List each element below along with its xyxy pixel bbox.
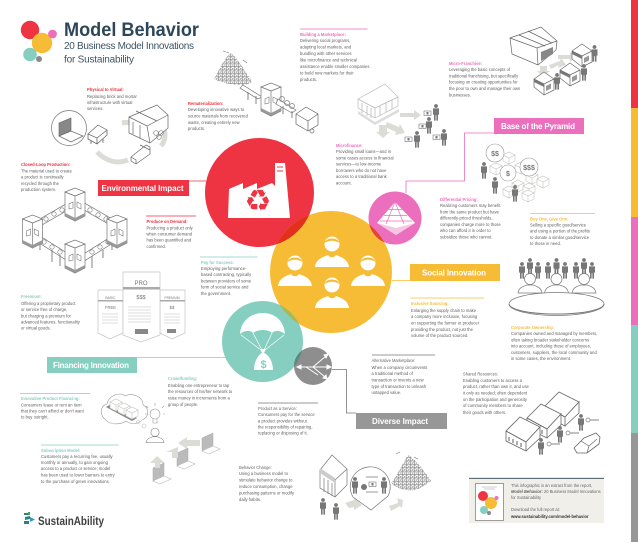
- report cover thumbnail: [476, 484, 504, 520]
- circle: environmental impact: [205, 138, 314, 247]
- illustration: pricing tables: $$: [170, 305, 175, 310]
- text: micro-franchise: traditional franchising, but specifically: [449, 74, 519, 78]
- text: corporate ownership: Corporate Ownership:: [511, 325, 554, 330]
- text: physical to virtual: Replacing brick and mortar: [87, 94, 138, 99]
- text: physical to virtual: [87, 87, 138, 111]
- text: freemium: Offering a proprietary product: [21, 301, 76, 306]
- illustration: shared houses and car: [506, 392, 600, 455]
- text: micro-franchise: the poor to own and manage their own: [449, 86, 521, 91]
- text: pay for success: [200, 257, 258, 296]
- text: inclusive sourcing: providing the product, not just the: [411, 327, 474, 332]
- text: alternative marketplace: Alternative Marketplace:: [372, 358, 415, 363]
- text: innovative product financing: that they can't afford or don't want: [21, 408, 85, 414]
- illustration: closed-loop production: [22, 188, 127, 273]
- illustration: behavior change: [320, 452, 431, 520]
- illustration: base of the pyramid: [481, 144, 549, 202]
- text: building a marketplace: like microfinance and technical: [300, 58, 357, 62]
- text: behavior change: Behavior Change:: [239, 465, 272, 470]
- text: shared resources: of community members to share: [463, 403, 523, 408]
- illustration: pricing tables: FREE: [105, 305, 116, 310]
- text: shared resources: their goods with others.: [463, 410, 506, 415]
- text: alternative marketplace: When a company circumvents: [372, 365, 427, 370]
- circle: social innovation: [270, 211, 392, 333]
- text: micro-franchise: Leveraging the basic concepts of: [449, 67, 511, 72]
- text: freemium: advanced features, functionality: [21, 320, 81, 324]
- callout text: Download the full report at:: [511, 507, 560, 512]
- text: innovative product financing: Innovative Product Financing:: [21, 396, 80, 401]
- colour stripe: [631, 0, 638, 542]
- text: shared resources: product, rather than own it, and use: [463, 384, 530, 389]
- label: environmental impact: Environmental Impact: [102, 184, 184, 193]
- label: diverse impact: [356, 413, 447, 429]
- text: buy one, give one: Selling a specific good/service: [530, 222, 587, 228]
- text: freemium: [21, 294, 81, 330]
- text: produce on demand: Produce on Demand:: [146, 219, 188, 224]
- text: micro-franchise: businesses.: [449, 92, 471, 98]
- text: differential pricing: differently-priced thresholds,: [440, 216, 493, 220]
- title: 20 Business Model Innovations: [64, 41, 194, 52]
- text: behavior change: [239, 465, 295, 502]
- text: freemium: Freemium:: [21, 294, 42, 299]
- text: microfinance: access to a traditional bank: [336, 174, 388, 179]
- text: microfinance: Microfinance:: [336, 143, 363, 148]
- text: building a marketplace: to build new markets for their: [300, 70, 354, 76]
- icon: parachute and money bag: [240, 313, 285, 371]
- text: behavior change: reduce consumption, change: [239, 484, 293, 489]
- icon: diverging arrows: [297, 354, 331, 379]
- text: differential pricing: Realizing customers may benefit: [440, 203, 501, 208]
- text: alternative marketplace: type of transaction to unleash: [372, 384, 427, 389]
- circle overlaps: [276, 215, 384, 324]
- text: subscription model: [41, 445, 118, 484]
- text: pay for success: form of social service and: [201, 284, 249, 290]
- icon: factory: ♻: [245, 184, 271, 219]
- icon: people: [278, 236, 385, 308]
- text: dematerialization: products.: [188, 126, 205, 131]
- circle: base of the pyramid: [368, 192, 422, 244]
- text: buy one, give one: [530, 214, 595, 246]
- callout text: This infographic is an extract from the report,: [511, 483, 592, 488]
- text: shared resources: [463, 372, 530, 415]
- text: microfinance: [336, 143, 394, 186]
- text: micro-franchise: [449, 61, 521, 98]
- text: inclusive sourcing: a company more inclusive, focusing: [411, 314, 478, 319]
- text: buy one, give one: to those in need.: [530, 241, 561, 246]
- illustration: base of the pyramid: $$: [491, 151, 499, 158]
- text: microfinance: borrowers who do not have: [336, 168, 387, 173]
- text: crowdfunding: Crowdfunding:: [168, 376, 197, 381]
- text: pay for success: Pay for Success:: [201, 260, 234, 265]
- text: corporate ownership: Companies owned and managed by members,: [511, 331, 597, 336]
- text: alternative marketplace: transaction or invents a new: [372, 378, 424, 382]
- text: corporate ownership: customers, suppliers, the local community and: [511, 350, 597, 355]
- text: inclusive sourcing: [410, 298, 484, 338]
- text: micro-franchise: Micro-Franchise:: [449, 61, 482, 66]
- text: behavior change: Using a business model to: [239, 471, 289, 476]
- text: shared resources: Shared Resources:: [463, 372, 498, 376]
- text: micro-franchise: focusing on creating opportunities for: [449, 80, 518, 84]
- panel: report callout: [469, 478, 604, 523]
- icon: parachute and money bag: $: [260, 359, 267, 371]
- text: physical to virtual: Physical to Virtual:: [87, 87, 124, 92]
- text: dematerialization: source materials from recovered: [188, 114, 249, 118]
- text: pay for success: Employing performance-: [201, 266, 247, 271]
- text: inclusive sourcing: volume of the product sourced.: [411, 333, 468, 338]
- text: product as a service: a product provides without: [258, 418, 308, 424]
- text: physical to virtual: infrastructure with virtual: [87, 100, 132, 105]
- text: innovative product financing: [20, 394, 90, 420]
- illustration: base of the pyramid: $$$: [523, 165, 535, 172]
- text: shared resources: Enabling customers to access a: [463, 378, 523, 383]
- label: financing innovation: [47, 357, 137, 373]
- text: product as a service: replacing or disposing of it.: [258, 430, 308, 436]
- text: alternative marketplace: a traditional method of: [372, 371, 414, 376]
- text: behavior change: purchasing patterns or modify: [239, 490, 295, 496]
- text: crowdfunding: Enabling one entrepreneur to tap: [168, 383, 230, 388]
- text: microfinance: some cases access to financial: [336, 156, 394, 160]
- text: corporate ownership: into account, including those of employees,: [511, 344, 591, 348]
- logo circles: [21, 21, 57, 62]
- illustration: dematerialization line: [214, 51, 318, 133]
- text: differential pricing: subsidize those who cannot.: [440, 234, 493, 240]
- label: financing innovation: Financing Innovation: [53, 361, 129, 370]
- text: differential pricing: Differential Pricing:: [440, 197, 478, 202]
- text: differential pricing: companies charge more to those: [440, 222, 502, 227]
- text: buy one, give one: and using a portion of the profits: [530, 228, 590, 234]
- text: product as a service: the responsibility of repairing,: [258, 424, 313, 430]
- text: crowdfunding: the resources of his/her network to: [168, 389, 233, 394]
- text: alternative marketplace: [372, 355, 435, 395]
- text: freemium: or service free of charge,: [21, 307, 67, 312]
- text: innovative product financing: to buy outright.: [21, 414, 49, 420]
- callout text: Model Behavior: 20 Business Model Innovations: [511, 489, 601, 494]
- text: closed-loop production: Closed-Loop Production:: [21, 162, 70, 167]
- label: social innovation: [410, 264, 500, 281]
- text: building a marketplace: assistance enable smaller companies: [300, 64, 369, 69]
- text: crowdfunding: group of people.: [168, 402, 198, 407]
- text: crowdfunding: raise money in increments from a: [168, 396, 230, 400]
- illustration: pricing tables: $$$: [136, 295, 146, 301]
- text: produce on demand: confirmed.: [146, 244, 166, 249]
- illustration: physical to virtual: [52, 105, 168, 164]
- text: microfinance: Providing small loans—and in: [336, 149, 392, 154]
- text: closed-loop production: The material used to create: [21, 168, 73, 174]
- text: inclusive sourcing: Enlarging the supply chain to make: [411, 308, 477, 313]
- icon: factory: [228, 163, 290, 219]
- text: behavior change: daily habits.: [239, 497, 261, 502]
- label: environmental impact: [98, 180, 189, 196]
- label: base of the pyramid: [494, 118, 584, 134]
- text: differential pricing: [440, 197, 502, 240]
- text: product as a service: [258, 403, 318, 436]
- illustration: pricing tables: PREMIUM: [164, 296, 180, 300]
- text: differential pricing: who can afford it in order to: [440, 228, 491, 233]
- callout text: for Sustainability: [511, 495, 542, 500]
- text: closed-loop production: production system.: [21, 187, 56, 192]
- text: freemium: or virtual goods.: [21, 326, 51, 330]
- text: corporate ownership: in some cases, the environment.: [511, 356, 571, 361]
- illustration: pricing tables: PRO: [134, 281, 148, 287]
- text: inclusive sourcing: on supporting the farmer or producer: [411, 320, 480, 326]
- connector lines: [137, 133, 494, 413]
- illustration: pricing tables: [98, 272, 185, 342]
- icon: pyramid: [377, 202, 415, 235]
- text: produce on demand: [146, 216, 196, 249]
- text: differential pricing: from the same product but have: [440, 210, 500, 214]
- text: product as a service: Product as a Service:: [258, 406, 297, 411]
- text: produce on demand: Producing a product only: [146, 226, 194, 230]
- illustration: micro-franchise: [510, 27, 598, 95]
- text: microfinance: services—to low-income: [336, 162, 382, 166]
- text: subscription model: monthly or annually, to gain ongoing: [41, 460, 109, 465]
- text: dematerialization: waste, creating entirely new: [188, 120, 240, 125]
- text: freemium: but charging a premium for: [21, 314, 72, 318]
- text: crowdfunding: [168, 376, 233, 407]
- text: dematerialization: Rematerialization:: [188, 101, 223, 106]
- text: buy one, give one: to donate a similar good/service: [530, 235, 590, 240]
- text: subscription model: has been used to lower barriers to entry: [41, 472, 116, 478]
- text: dematerialization: [188, 101, 249, 131]
- text: closed-loop production: recycled through the: [21, 181, 60, 186]
- text: building a marketplace: products.: [300, 77, 317, 82]
- title: Model Behavior: [64, 20, 200, 41]
- label: base of the pyramid: Base of the Pyramid: [501, 122, 575, 131]
- text: produce on demand: when consumer demand: [146, 232, 193, 236]
- text: dematerialization: Developing innovative ways to: [188, 107, 245, 112]
- text: closed-loop production: [21, 162, 73, 192]
- text: corporate ownership: [511, 325, 597, 361]
- illustration: pricing tables: BASIC: [105, 296, 116, 300]
- text: building a marketplace: adapting local markets, and: [300, 44, 352, 50]
- text: alternative marketplace: untapped value.: [372, 390, 401, 395]
- text: product as a service: Consumers pay for the service: [258, 412, 315, 417]
- text: building a marketplace: Delivering social programs,: [300, 38, 350, 43]
- text: building a marketplace: [300, 29, 369, 82]
- text: subscription model: Customers pay a recurring fee, usually: [41, 454, 114, 459]
- circle: financing innovation: [222, 301, 303, 382]
- text: building a marketplace: bundling with other services: [300, 51, 352, 56]
- illustration: microfinance bank: [358, 84, 447, 148]
- text: closed-loop production: a product is continually: [21, 175, 65, 180]
- text: physical to virtual: services.: [87, 106, 104, 111]
- text: behavior change: stimulate behavior change to: [239, 478, 293, 482]
- text: building a marketplace: Building a Marketplace:: [300, 32, 346, 37]
- illustration: corporate ownership: [509, 258, 604, 316]
- text: subscription model: Subscription Model:: [41, 448, 80, 453]
- text: pay for success: the government.: [201, 291, 231, 296]
- text: microfinance: account.: [336, 180, 352, 186]
- text: innovative product financing: Consumers lease or rent an item: [21, 402, 82, 408]
- callout text: www.sustainability.com/model-behavior: [510, 514, 589, 519]
- text: shared resources: on the participation and generosity: [463, 397, 528, 402]
- text: produce on demand: has been quantified and: [146, 238, 192, 242]
- text: buy one, give one: Buy One, Give One:: [530, 216, 568, 222]
- text: pay for success: based contracting, typically: [201, 272, 252, 277]
- text: subscription model: access to a product or service; model: [41, 466, 110, 471]
- illustration: crowdfunding: [101, 394, 220, 484]
- title: [64, 20, 200, 66]
- logo: SustainAbility: [24, 512, 104, 528]
- label: diverse impact: Diverse Impact: [372, 417, 428, 426]
- label: social innovation: Social Innovation: [422, 268, 486, 278]
- text: pay for success: between providers of some: [201, 278, 252, 284]
- text: subscription model: to the purchase of green innovations.: [41, 479, 110, 484]
- logo: SustainAbility: SustainAbility: [38, 514, 104, 528]
- text: corporate ownership: often taking broader stakeholder concerns: [511, 338, 589, 342]
- text: shared resources: it only as needed; often dependent: [463, 390, 528, 396]
- circle: diverse impact: [294, 347, 332, 385]
- illustration: base of the pyramid: $: [506, 171, 510, 178]
- title: for Sustainability: [64, 54, 134, 66]
- text: inclusive sourcing: Inclusive Sourcing:: [411, 301, 449, 306]
